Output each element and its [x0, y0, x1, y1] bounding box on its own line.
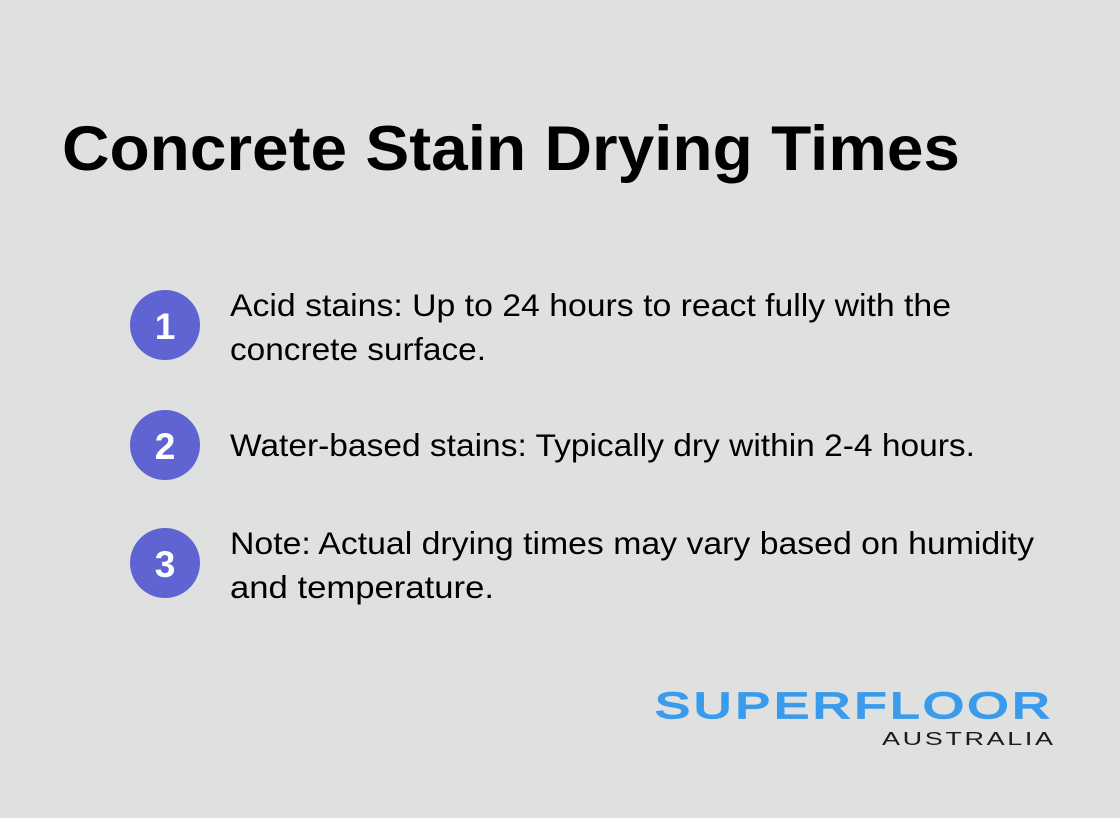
item 3 text: and temperature.: [230, 569, 494, 605]
logo: Superfloor Australia: [655, 685, 1056, 749]
number badge 3: 3: [155, 544, 175, 585]
item 2 text: Water-based stains: Typically dry within 2-4 hours.: [230, 427, 975, 463]
item 3 text: [230, 525, 1034, 605]
number badge 2: 2: [155, 426, 175, 467]
item 3 text: Note: Actual drying times may vary based on humidity: [230, 525, 1034, 561]
item 1: [130, 287, 951, 367]
item 1 text: Acid stains: Up to 24 hours to react fully with the: [230, 287, 951, 323]
item 3: [130, 525, 1034, 605]
logo: Superfloor Australia: SUPERFLOOR: [655, 685, 1054, 726]
number badge 1: [130, 290, 200, 360]
number badge 3: [130, 528, 200, 598]
number badge 2: [130, 410, 200, 480]
item 1 text: concrete surface.: [230, 331, 486, 367]
title: Concrete Stain Drying Times: [62, 114, 960, 184]
logo: Superfloor Australia: AUSTRALIA: [882, 729, 1056, 749]
item 2: [130, 410, 975, 480]
number badge 1: 1: [155, 306, 175, 347]
item 1 text: [230, 287, 951, 367]
